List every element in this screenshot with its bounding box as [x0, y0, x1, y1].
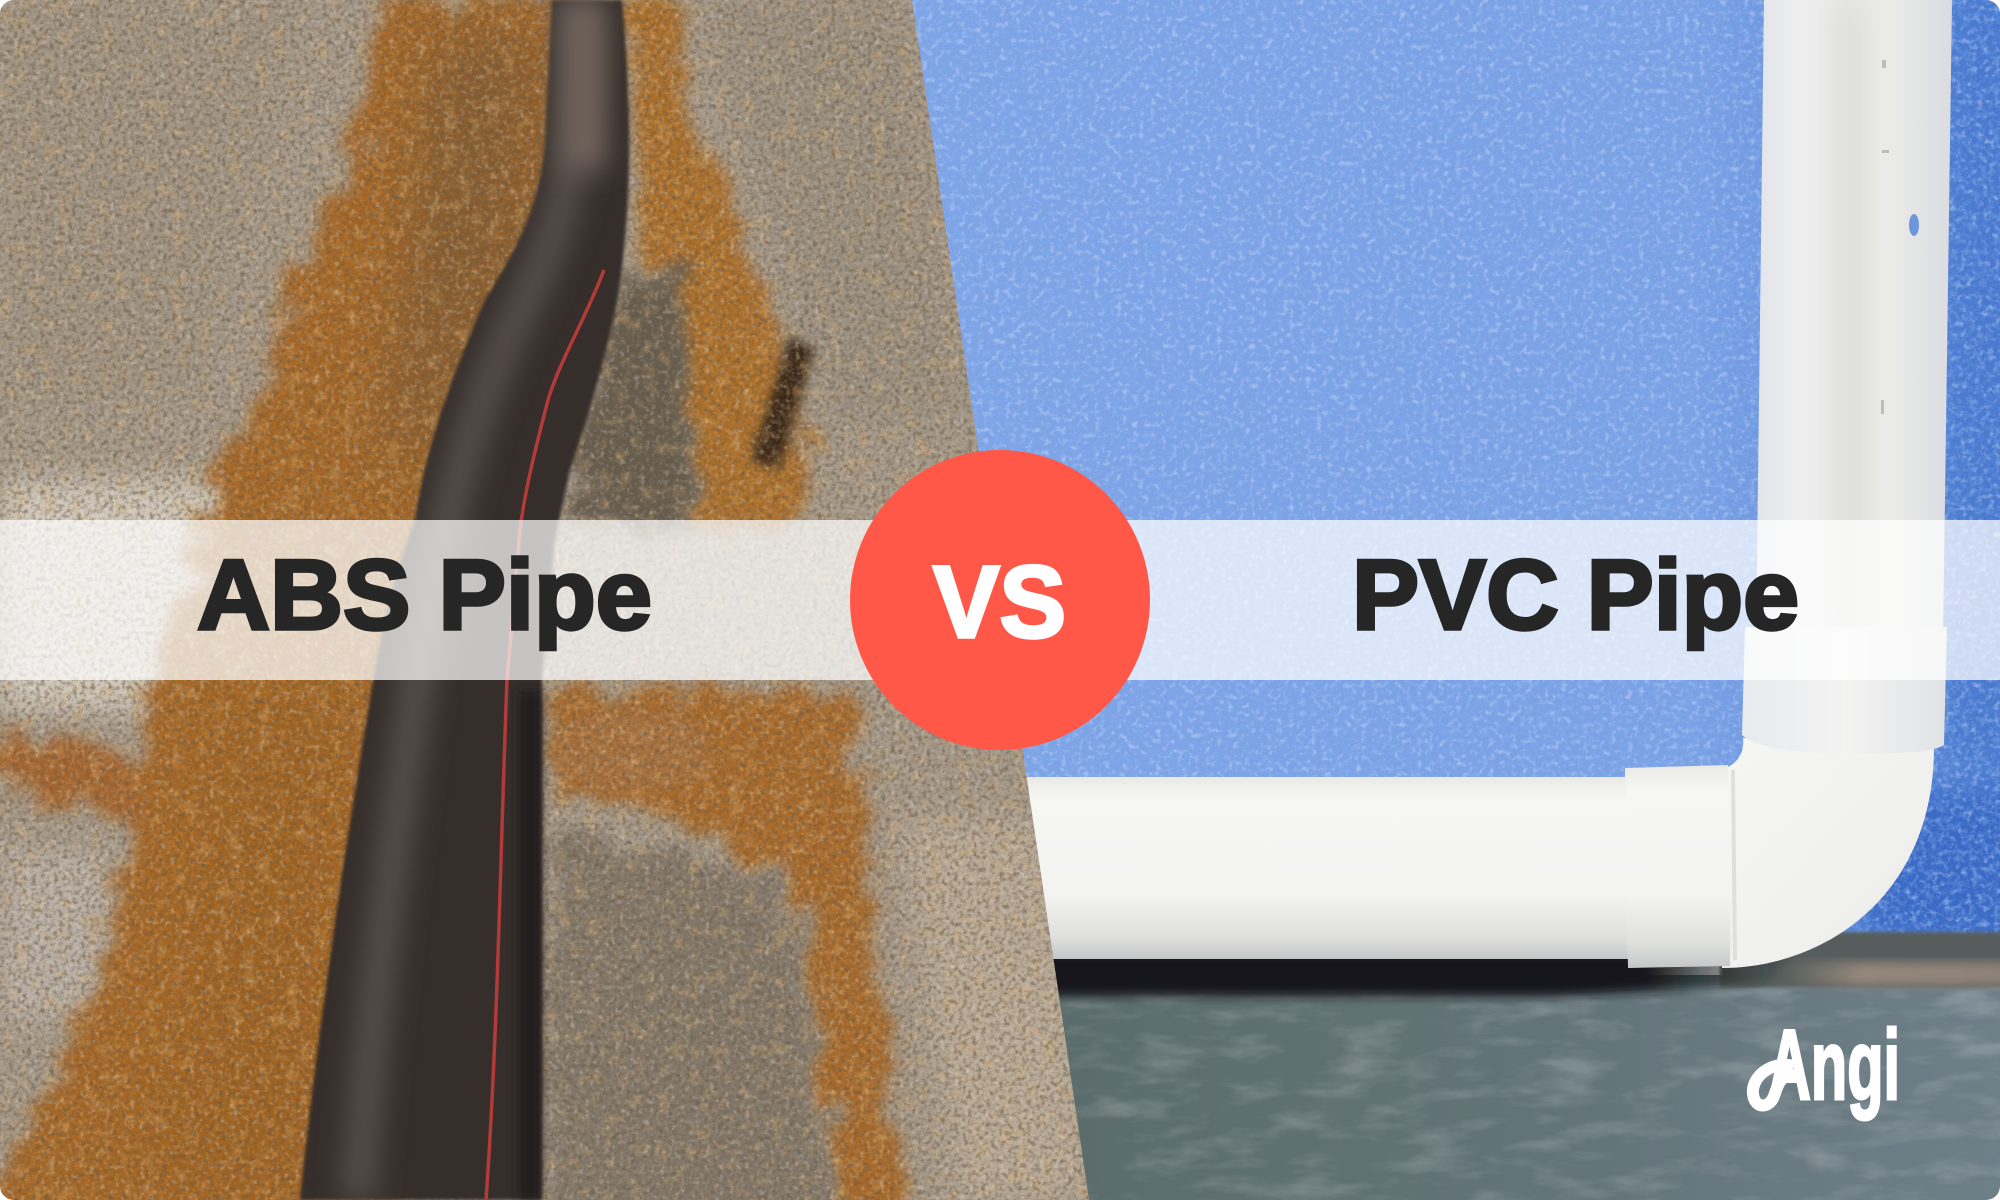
- panel: ABS pipe photo: [0, 0, 1100, 1200]
- elbow: [1722, 738, 1934, 968]
- Angi logo: Angi: [1768, 1009, 1900, 1120]
- VS badge: [850, 450, 1150, 750]
- panel: PVC pipe photo: [900, 0, 2000, 1200]
- label band: [0, 520, 2000, 680]
- heading: ABS Pipe: ABS Pipe: [197, 539, 652, 650]
- white PVC pipe assembly: [1020, 0, 1952, 968]
- vertical pipe: [1756, 0, 1952, 640]
- pipe shadow on floor: [1030, 950, 1800, 996]
- base gray soil: [0, 0, 1100, 1200]
- lighter soil patches: [0, 0, 1090, 1200]
- black ABS pipe: [300, 0, 629, 1200]
- Angi logo: [1753, 1009, 1900, 1120]
- darker earth near the pipe top: [150, 30, 545, 1200]
- dark crevice: [750, 335, 815, 470]
- soil flecks and grain: [0, 0, 1100, 1200]
- VS badge: VS: [933, 545, 1066, 659]
- gravel trench: [545, 270, 845, 1200]
- concrete floor: [1000, 932, 2000, 1200]
- orange clod: [545, 708, 715, 792]
- pipe scuff marks: [1881, 60, 1889, 414]
- vertical coupling: [1742, 627, 1947, 754]
- horizontal coupling: [1625, 765, 1731, 968]
- horizontal pipe: [1020, 777, 1628, 959]
- heading: PVC Pipe: PVC Pipe: [1352, 539, 1799, 650]
- vertical pipe stain: [1834, 5, 1864, 520]
- blue stucco wall: [900, 0, 2000, 960]
- red stripe on pipe: [486, 270, 604, 1200]
- orange soil: [0, 0, 910, 1200]
